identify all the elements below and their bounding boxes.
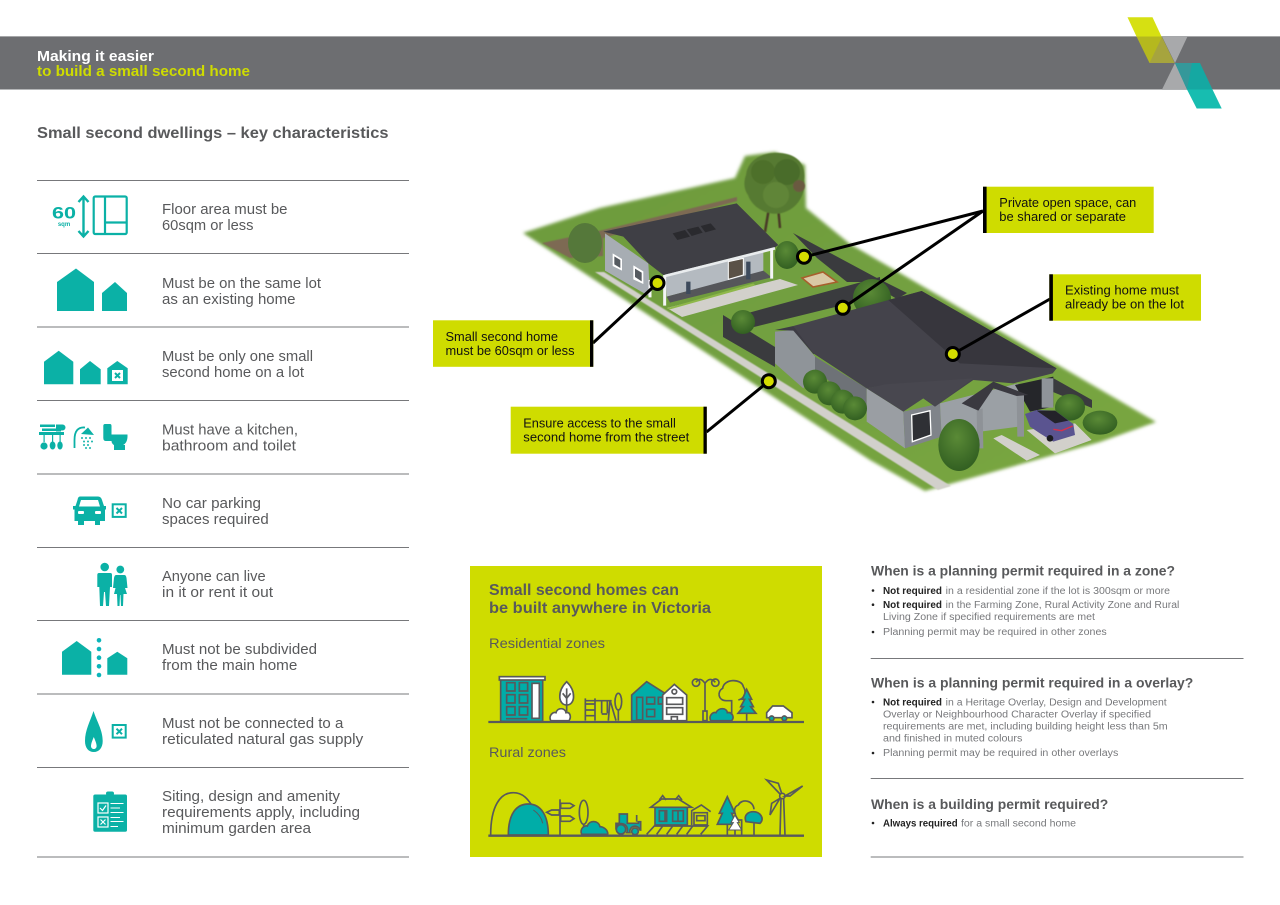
callout: street access: second home from the street	[523, 430, 690, 444]
icon: 60 sqm floor plan	[52, 196, 127, 236]
bullet list: for a small second home	[961, 818, 1076, 829]
title: to build a small second home	[37, 63, 250, 80]
bullet list: Not required	[883, 586, 942, 597]
icon: 60 sqm floor plan: sqm	[58, 222, 70, 228]
text: anyone can live: Anyone can live	[162, 569, 266, 585]
text: siting and design: requirements apply, including	[162, 805, 360, 821]
text: anyone can live: in it or rent it out	[162, 585, 273, 601]
label: residential zones: Residential zones	[489, 635, 605, 651]
callout: private open space: Private open space, can	[999, 196, 1136, 210]
text: gas supply: Must not be connected to a	[162, 716, 344, 732]
text: gas supply	[162, 716, 364, 748]
heading: When is a planning permit required in a overlay?	[871, 675, 1193, 691]
callout: small second home	[433, 320, 593, 367]
bullet list: Planning permit may be required in other overlays	[883, 748, 1118, 759]
text: subdivided: from the main home	[162, 658, 297, 674]
text: floor area: Floor area must be	[162, 202, 288, 218]
bullet list: in the Farming Zone, Rural Activity Zone and Rural	[946, 600, 1179, 611]
illustration: residential streetscape	[488, 677, 804, 722]
text: kitchen: Must have a kitchen,	[162, 422, 298, 438]
text: kitchen: bathroom and toilet	[162, 438, 296, 454]
marker: existing home	[946, 348, 959, 360]
callout connector lines	[593, 211, 1050, 432]
icon: 60 sqm floor plan: 60	[52, 204, 76, 222]
timber fence	[542, 197, 737, 258]
panel: building permit	[871, 796, 1108, 829]
divider	[871, 658, 1244, 660]
marker: open space back	[798, 250, 810, 263]
bullet list: in a Heritage Overlay, Design and Development	[946, 697, 1167, 708]
callout: private open space	[983, 187, 1154, 233]
panel heading: Small second homes can	[489, 582, 679, 599]
title: Making it easier	[37, 48, 154, 65]
text: subdivided	[162, 642, 317, 674]
lawn and lot	[523, 152, 1156, 491]
callout: street access	[511, 407, 707, 454]
callout: private open space: be shared or separate	[999, 210, 1126, 224]
icon: homes with dotted divide	[62, 638, 127, 677]
panel heading	[489, 582, 711, 617]
icon: kitchen, shower, toilet	[39, 424, 128, 450]
bullet list: Not required	[883, 697, 942, 708]
bullet list: Overlay or Neighbourhood Character Overlay if specified	[883, 709, 1151, 720]
callout: existing home	[1049, 274, 1201, 321]
marker: open space front	[836, 301, 849, 314]
text: car parking: spaces required	[162, 512, 269, 528]
heading: key characteristics: Small second dwellings – key characteristics	[37, 125, 389, 142]
icon: two people	[97, 563, 128, 606]
divider	[871, 856, 1244, 858]
text: siting and design	[162, 789, 360, 837]
logo chevrons	[1128, 17, 1222, 108]
shrubs	[568, 223, 891, 334]
marker: small second home	[651, 276, 664, 290]
small second home	[603, 203, 778, 309]
text: car parking: No car parking	[162, 496, 261, 512]
panel: planning permit in an overlay	[871, 675, 1193, 759]
text: siting and design: minimum garden area	[162, 821, 312, 837]
sandbox	[802, 272, 837, 287]
bullet list: requirements are met, including building height less than 5m	[883, 721, 1168, 732]
divider	[871, 778, 1244, 780]
icon: car with cross	[73, 496, 126, 525]
bullet list: and finished in muted colours	[883, 733, 1022, 744]
text: kitchen	[162, 422, 298, 454]
header band	[0, 36, 1280, 90]
text: same lot: as an existing home	[162, 292, 296, 308]
parked car	[1025, 410, 1075, 442]
callout: existing home: already be on the lot	[1065, 298, 1185, 312]
heading: When is a building permit required?	[871, 796, 1108, 812]
bullet list: in a residential zone if the lot is 300sqm or more	[946, 586, 1170, 597]
panel heading: be built anywhere in Victoria	[489, 600, 711, 617]
icon: two homes	[57, 268, 127, 311]
text: siting and design: Siting, design and amenity	[162, 789, 341, 805]
driveway path to second home	[667, 279, 798, 317]
callout: street access: Ensure access to the small	[523, 416, 676, 430]
bullet list: Planning permit may be required in other zones	[883, 627, 1107, 638]
bullet list	[872, 586, 1179, 638]
icon: gas flame with cross	[85, 711, 126, 752]
text: anyone can live	[162, 569, 273, 601]
text: floor area	[162, 202, 288, 234]
text: one home: second home on a lot	[162, 365, 304, 381]
callout: small second home: Small second home	[446, 330, 558, 344]
label: rural zones: Rural zones	[489, 744, 566, 760]
callout: small second home: must be 60sqm or less	[446, 344, 574, 358]
title	[37, 48, 250, 80]
text: gas supply: reticulated natural gas supply	[162, 732, 364, 748]
text: one home: Must be only one small	[162, 349, 313, 365]
text: car parking	[162, 496, 269, 528]
back tree	[744, 153, 805, 232]
text: floor area: 60sqm or less	[162, 218, 254, 234]
panel: planning permit in a zone	[871, 562, 1179, 638]
bullet list	[872, 697, 1168, 759]
marker: street access	[762, 375, 775, 388]
main existing home	[775, 291, 1117, 471]
text: one home	[162, 349, 313, 381]
dark fences	[723, 233, 1092, 408]
panel: characteristics list	[37, 180, 409, 857]
icon: only one second home	[44, 351, 128, 384]
bullet list: Always required	[883, 818, 958, 829]
street footpath	[595, 272, 951, 490]
text: same lot	[162, 276, 321, 308]
text: same lot: Must be on the same lot	[162, 276, 321, 292]
bullet list: Not required	[883, 600, 942, 611]
callout: existing home: Existing home must	[1065, 284, 1180, 298]
bullet list: Living Zone if specified requirements are met	[883, 612, 1095, 623]
bullet list	[872, 818, 1076, 829]
panel: built anywhere in Victoria	[470, 566, 822, 857]
heading: When is a planning permit required in a zone?	[871, 562, 1175, 578]
text: subdivided: Must not be subdivided	[162, 642, 317, 658]
illustration: isometric lot with two homes	[523, 152, 1156, 491]
illustration: rural landscape	[488, 780, 804, 836]
icon: checklist clipboard	[93, 792, 127, 832]
